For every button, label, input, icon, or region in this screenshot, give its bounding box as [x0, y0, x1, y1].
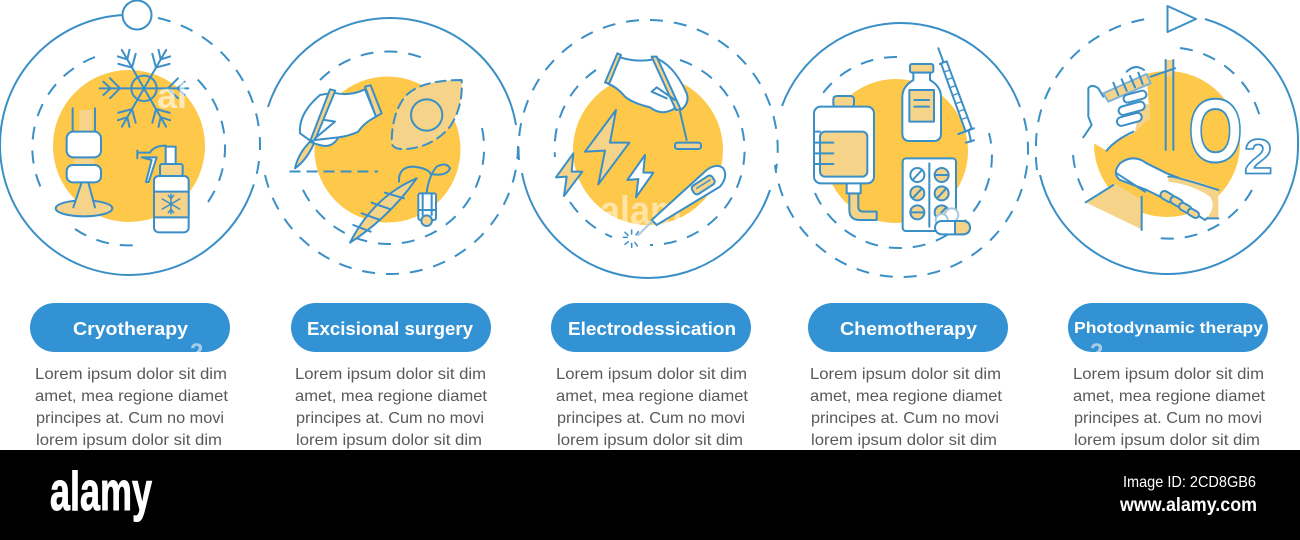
- description text: Lorem ipsum dolor sit dim: [810, 366, 1001, 383]
- yellow disc: [573, 75, 723, 225]
- watermark fragment: alam: [600, 189, 682, 233]
- description text: amet, mea regione diamet: [556, 388, 749, 405]
- panel: cryotherapy circle: [0, 0, 260, 275]
- icon: medicine vial: [902, 64, 941, 141]
- icon: oxygen tube: [1166, 60, 1173, 150]
- watermark fragment: al: [157, 75, 187, 116]
- pill heading: [291, 303, 491, 352]
- description text: amet, mea regione diamet: [810, 388, 1003, 405]
- image id: Image ID: 2CD8GB6: [1123, 474, 1256, 491]
- description text: amet, mea regione diamet: [35, 388, 229, 405]
- pill heading: Photodynamic therapy: [1074, 320, 1263, 337]
- outer ring: [0, 15, 260, 275]
- panel: excisional surgery circle: [265, 18, 518, 274]
- inner dashed ring: [555, 60, 745, 245]
- inner dashed ring: [815, 57, 992, 248]
- description text: Lorem ipsum dolor sit dim: [35, 366, 227, 383]
- column: cryotherapy: [30, 303, 230, 449]
- column: chemotherapy: [808, 303, 1008, 449]
- inner dashed ring: [300, 51, 484, 244]
- description text: principes at. Cum no movi: [36, 410, 224, 427]
- yellow disc: [824, 79, 968, 223]
- alamy logo: alamy: [50, 460, 152, 522]
- description text: lorem ipsum dolor sit dim: [557, 432, 743, 449]
- pill heading: Electrodessication: [568, 319, 736, 339]
- description text: Lorem ipsum dolor sit dim: [556, 366, 747, 383]
- yellow disc: [314, 76, 460, 222]
- description text: Lorem ipsum dolor sit dim: [295, 366, 486, 383]
- description text: lorem ipsum dolor sit dim: [811, 432, 997, 449]
- yellow disc: [1094, 71, 1240, 217]
- pill heading: [30, 303, 230, 352]
- panel: chemotherapy circle: [775, 23, 1028, 277]
- website: www.alamy.com: [1119, 495, 1257, 516]
- pill heading: Chemotherapy: [840, 319, 977, 339]
- description text: Lorem ipsum dolor sit dim: [1073, 366, 1264, 383]
- outer ring: [775, 23, 1028, 277]
- description text: lorem ipsum dolor sit dim: [36, 432, 222, 449]
- description text: principes at. Cum no movi: [811, 410, 999, 427]
- yellow disc: [53, 70, 205, 222]
- description text: [295, 366, 488, 449]
- step marker triangle: [1168, 6, 1196, 32]
- icon: O2 symbol: 2: [1244, 130, 1273, 185]
- outer ring: [1036, 18, 1298, 274]
- pill heading: [551, 303, 751, 352]
- pill heading: 2: [1090, 339, 1103, 366]
- icon: suture with needle: [350, 165, 450, 243]
- description text: amet, mea regione diamet: [1073, 388, 1266, 405]
- icon: lightning bolts: [556, 110, 653, 197]
- icon: blister pack and pills: [903, 158, 970, 234]
- incision dashed line: [290, 170, 378, 172]
- column: electrodessication: [551, 303, 751, 449]
- description text: [1073, 366, 1266, 449]
- icon: excised lesion: [392, 80, 462, 149]
- description text: amet, mea regione diamet: [295, 388, 488, 405]
- description text: [556, 366, 749, 449]
- outer ring: [265, 18, 518, 274]
- description text: [810, 366, 1003, 449]
- icon: cryo device: [56, 108, 112, 216]
- description text: [35, 366, 229, 449]
- pill heading: Excisional surgery: [307, 319, 473, 339]
- panel: photodynamic therapy circle: [1036, 6, 1298, 274]
- icon: phototherapy lamp and hand: [1086, 158, 1218, 230]
- icon: hand with syringe: [1083, 66, 1175, 151]
- description text: lorem ipsum dolor sit dim: [1074, 432, 1260, 449]
- column: excisional surgery: [291, 303, 491, 449]
- icon: syringe: [938, 48, 974, 143]
- icon: spray bottle: [137, 146, 189, 232]
- pill heading: Cryotherapy: [73, 319, 188, 339]
- panel: electrodessication circle: [519, 20, 778, 278]
- column: photodynamic therapy: [1068, 303, 1268, 449]
- step marker circle: [122, 0, 152, 30]
- outer ring: [519, 20, 778, 278]
- description text: principes at. Cum no movi: [557, 410, 745, 427]
- icon: O2 symbol: O: [1188, 82, 1243, 182]
- footer bar: [0, 450, 1300, 540]
- pill heading: [808, 303, 1008, 352]
- description text: principes at. Cum no movi: [296, 410, 484, 427]
- inner dashed ring: [32, 57, 225, 245]
- description text: principes at. Cum no movi: [1074, 410, 1262, 427]
- icon: hand with cautery pen: [605, 53, 701, 149]
- icon: IV bag: [814, 96, 877, 220]
- icon: thermometer: [623, 166, 725, 247]
- icon: hand with scalpel: [295, 85, 382, 168]
- inner dashed ring: [1073, 48, 1260, 239]
- description text: lorem ipsum dolor sit dim: [296, 432, 482, 449]
- pill heading: 2: [190, 339, 203, 366]
- icon: snowflake: [100, 45, 188, 132]
- pill heading: [1068, 303, 1268, 352]
